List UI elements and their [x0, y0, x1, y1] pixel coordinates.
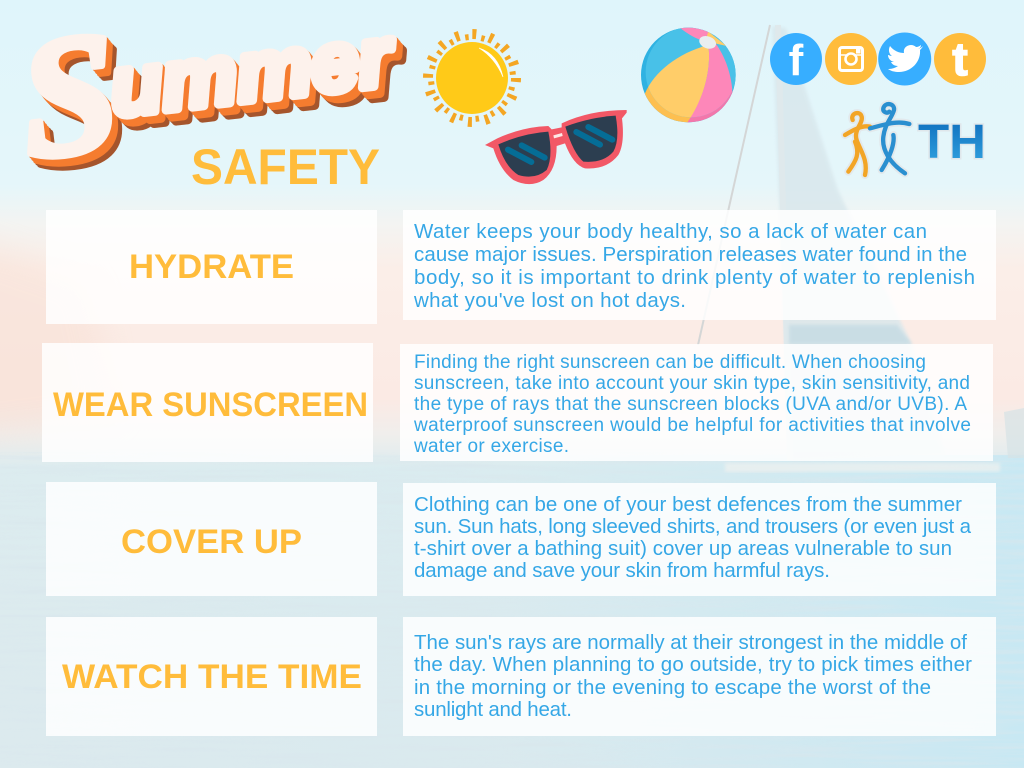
icon: Tumblr: [934, 33, 986, 85]
panel: hydrate text: body, so it is important to drink plenty of water to replenish: [414, 266, 975, 289]
panel: wear sunscreen text: water or exercise.: [413, 436, 569, 457]
panel: watch the time text: sunlight and heat.: [414, 698, 572, 721]
title: Summer script lettering: S: [11, 0, 127, 196]
panel: wear sunscreen text: [400, 344, 993, 461]
icon: beach ball: [641, 28, 736, 122]
panel: wear sunscreen text: sunscreen, take into account your skin type, skin sensitivity, and: [414, 373, 970, 394]
logo: TH with two figures: [845, 104, 986, 175]
panel: cover up text: t-shirt over a bathing suit) cover up areas vulnerable to sun: [414, 537, 952, 560]
panel: cover up heading: COVER UP: [121, 523, 302, 561]
panel: hydrate heading: [46, 210, 377, 324]
panel: hydrate text: [403, 210, 996, 320]
panel: wear sunscreen heading: WEAR SUNSCREEN: [53, 386, 368, 424]
panel: wear sunscreen text: the type of rays that the sunscreen blocks (UVA and/or UVB). A: [414, 394, 967, 415]
logo: TH with two figures: TH: [918, 116, 986, 169]
panel: watch the time heading: [46, 617, 377, 736]
panel: hydrate text: cause major issues. Perspiration releases water found in the: [414, 243, 967, 266]
panel: watch the time text: the day. When planning to go outside, try to pick times either: [414, 653, 972, 676]
title: SAFETY: SAFETY: [191, 139, 380, 195]
panel: wear sunscreen heading: [42, 343, 373, 462]
panel: wear sunscreen text: waterproof sunscreen would be helpful for activities that involve: [413, 415, 971, 436]
icon: Tumblr: t: [952, 33, 968, 85]
panel: cover up heading: [46, 482, 377, 596]
panel: hydrate text: Water keeps your body healthy, so a lack of water can: [414, 220, 927, 243]
panel: cover up text: sun. Sun hats, long sleeved shirts, and trousers (or even just a: [414, 515, 972, 538]
panel: cover up text: [403, 483, 996, 596]
panel: wear sunscreen text: Finding the right sunscreen can be difficult. When choosing: [414, 352, 926, 373]
icon: sun: [428, 34, 516, 122]
panel: watch the time text: in the morning or the evening to escape the worst of the: [414, 676, 931, 699]
icon: Twitter: [878, 32, 931, 86]
panel: cover up text: Clothing can be one of your best defences from the summer: [414, 493, 962, 516]
icon: Facebook: [770, 33, 822, 85]
panel: hydrate heading: HYDRATE: [129, 248, 294, 286]
panel: watch the time text: [403, 617, 996, 736]
icon: Facebook: f: [789, 36, 804, 85]
title: Summer script lettering: ummer: [105, 8, 400, 134]
icon: sunglasses: [485, 110, 627, 184]
title: Summer script lettering: [11, 0, 406, 196]
panel: hydrate text: what you've lost on hot days.: [413, 289, 686, 312]
panel: watch the time heading: WATCH THE TIME: [62, 658, 362, 696]
icon: Instagram: [825, 33, 877, 85]
panel: watch the time text: The sun's rays are normally at their strongest in the middle of: [414, 631, 967, 654]
panel: cover up text: damage and save your skin from harmful rays.: [414, 559, 830, 582]
